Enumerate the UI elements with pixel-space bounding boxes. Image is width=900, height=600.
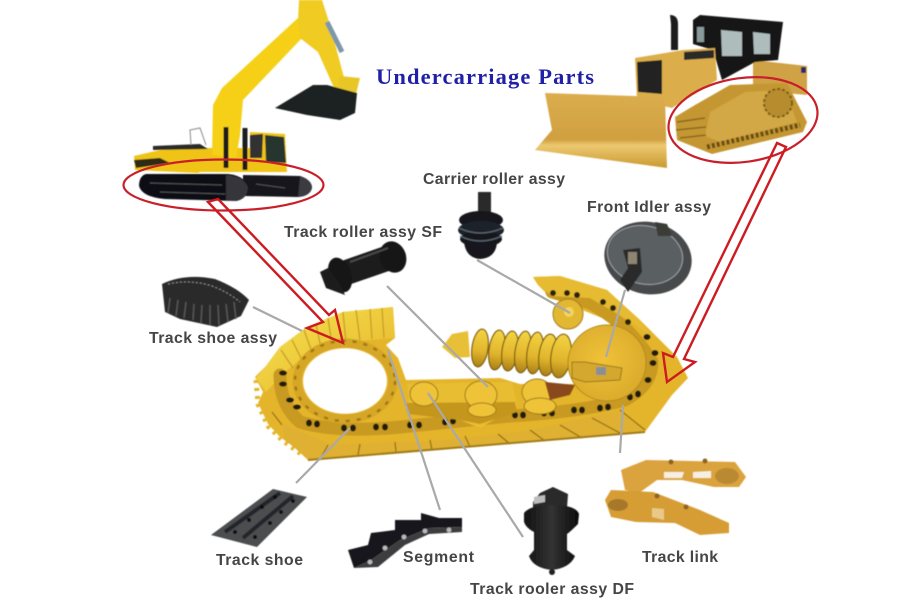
label: track shoe assy: Track shoe assy: [149, 330, 277, 347]
bulldozer: [535, 15, 807, 168]
hydraulic cylinders: [327, 22, 342, 52]
idler bracket: [572, 362, 622, 382]
leader line: track roller assy SF: [387, 286, 488, 387]
label: track rooler assy DF: Track rooler assy DF: [470, 581, 634, 598]
assembled track undercarriage: [255, 276, 688, 460]
excavator: [134, 0, 360, 201]
upper track return section: [533, 276, 650, 335]
part: track shoe assy: [162, 277, 249, 327]
idler wheel: [568, 325, 646, 401]
grouser teeth: [256, 380, 304, 456]
part: front idler assy: [597, 214, 699, 302]
label: track shoe: Track shoe: [216, 552, 303, 569]
lower track shoes: [283, 410, 645, 460]
label: segment: Segment: [403, 549, 475, 566]
part: track roller assy DF: [524, 487, 579, 575]
bulldozer track: [675, 83, 807, 154]
leader line: segment: [388, 350, 440, 510]
bulldozer cab: [693, 15, 783, 80]
bulldozer exhaust: [670, 15, 678, 50]
label: track roller assy SF: Track roller assy SF: [284, 224, 442, 241]
red arrow: bulldozer to track: [663, 143, 786, 382]
part: track roller assy SF: [320, 238, 411, 296]
part: segment: [348, 513, 462, 568]
recoil spring: [442, 328, 574, 379]
sprocket ring: [297, 343, 393, 419]
track base: [255, 276, 688, 460]
title: Undercarriage Parts: [376, 64, 594, 89]
track link chain: [280, 292, 652, 429]
label: carrier roller assy: Carrier roller assy: [423, 171, 565, 188]
label: front idler assy: Front Idler assy: [587, 199, 711, 216]
excavator body: [134, 132, 287, 173]
leader line: track shoe: [296, 428, 350, 483]
bulldozer sprocket: [764, 89, 792, 117]
excavator bucket: [275, 85, 357, 120]
callout ring: excavator undercarriage: [124, 160, 324, 210]
red arrow: excavator to track: [208, 199, 343, 343]
leader line: track shoe assy: [253, 307, 302, 331]
leader line: carrier roller assy: [477, 260, 570, 313]
excavator arm: [298, 0, 346, 90]
part: carrier roller assy: [458, 192, 504, 259]
link pin holes: [279, 334, 658, 432]
leader line: front idler assy: [606, 290, 625, 357]
bulldozer body: [635, 48, 717, 108]
rollers under frame: [410, 379, 556, 417]
upper shoes on drive curl: [256, 307, 395, 392]
callout ring: bulldozer undercarriage: [663, 68, 823, 172]
part: track shoe: [211, 489, 307, 547]
carrier roller: [553, 299, 583, 329]
roller frame: [407, 382, 517, 428]
leader line: track roller assy DF: [428, 393, 523, 537]
excavator tracks: [139, 174, 312, 201]
part: track link: [605, 458, 746, 535]
excavator cab: [250, 134, 263, 158]
label: track link: Track link: [642, 549, 718, 566]
bulldozer rear body: [753, 60, 807, 95]
leader line: track link: [620, 405, 623, 453]
excavator boom: [212, 18, 302, 158]
bulldozer blade: [535, 93, 667, 168]
